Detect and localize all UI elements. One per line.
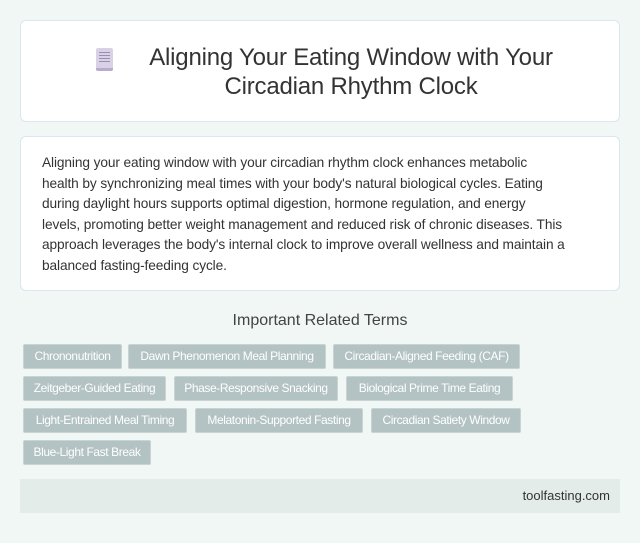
tags: Biological Prime Time Eating <box>359 381 500 395</box>
header card <box>20 20 620 122</box>
footer: toolfasting.com <box>523 488 610 503</box>
title: Aligning Your Eating Window with Your Circadian Rhythm Clock <box>149 44 553 100</box>
footer <box>20 479 620 513</box>
tags: Circadian-Aligned Feeding (CAF) <box>344 349 509 363</box>
icon: document scroll <box>96 48 113 71</box>
tags: Chrononutrition <box>34 349 111 363</box>
tags: Zeitgeber-Guided Eating <box>34 381 155 395</box>
description text: Aligning your eating window with your circadian rhythm clock enhances metabolic <box>42 155 527 170</box>
tags: Dawn Phenomenon Meal Planning <box>140 349 314 363</box>
description card <box>20 136 620 291</box>
tags: Melatonin-Supported Fasting <box>207 413 351 427</box>
description text: balanced fasting-feeding cycle. <box>42 258 227 272</box>
tags: Blue-Light Fast Break <box>34 445 140 459</box>
description text: levels, promoting better weight management and reduced risk of chronic diseases. This <box>42 216 562 232</box>
tags: Light-Entrained Meal Timing <box>36 413 174 427</box>
tags: Circadian Satiety Window <box>382 413 510 427</box>
description text: approach leverages the body's internal clock to improve overall wellness and maintain a <box>42 237 565 252</box>
description text: health by synchronizing meal times with your body's natural biological cycles. Eating <box>42 176 543 190</box>
heading: related terms: Important Related Terms <box>233 312 407 329</box>
description text <box>42 155 565 273</box>
description text: during daylight hours supports optimal digestion, hormone regulation, and energy <box>42 196 526 211</box>
tags: Phase-Responsive Snacking <box>184 381 328 395</box>
